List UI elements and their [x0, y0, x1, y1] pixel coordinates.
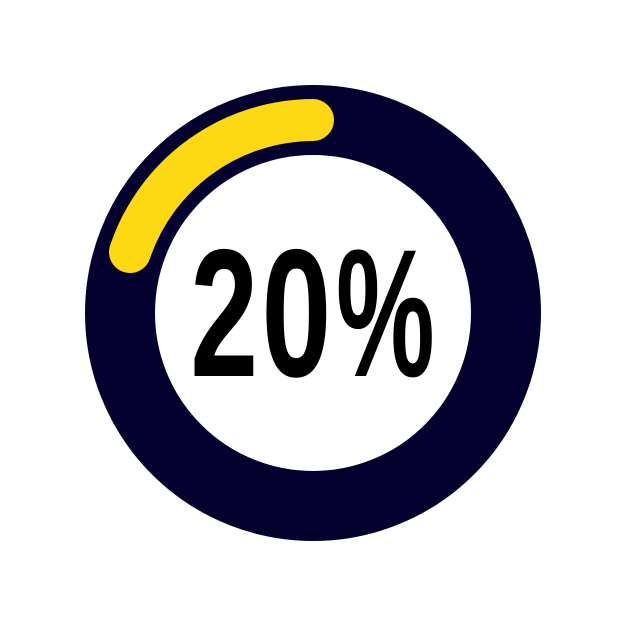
progress arc	[130, 120, 313, 252]
percentage value: 2	[190, 212, 258, 415]
percentage value: %	[336, 212, 435, 415]
percentage value	[190, 212, 435, 416]
ring track	[120, 120, 506, 506]
percentage value: 0	[262, 212, 331, 416]
donut chart: 20 percent	[120, 120, 506, 506]
